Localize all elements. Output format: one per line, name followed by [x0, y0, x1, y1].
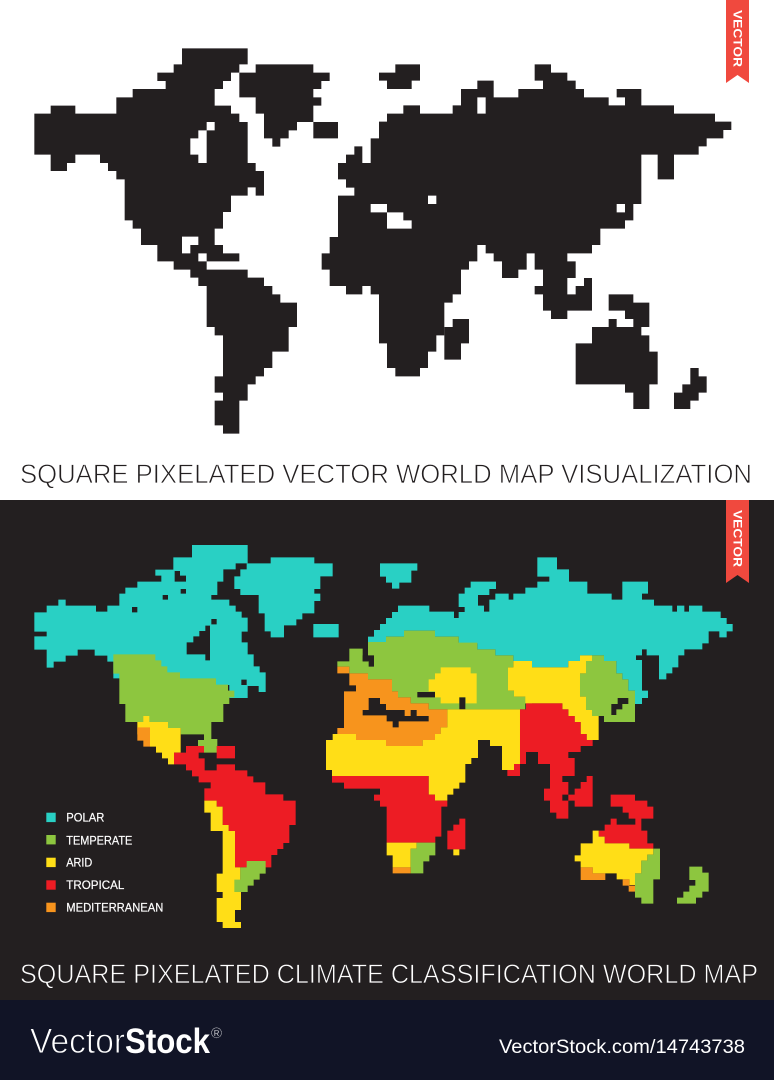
polar iceland: [313, 624, 339, 637]
legend: arid: ARID: [66, 858, 92, 870]
ribbon: top vector badge: VECTOR: [730, 10, 744, 67]
tropical madagascar: [447, 819, 465, 849]
temperate australia: [635, 849, 660, 904]
temperate south america: [234, 861, 266, 892]
caspian and aral seas: [417, 692, 465, 709]
legend: [46, 813, 163, 915]
climate classification world map: [34, 545, 733, 928]
eurasia and africa: [322, 64, 731, 376]
arid east asia: [508, 655, 599, 740]
arid north america: [137, 716, 181, 764]
polar north america: [34, 545, 266, 698]
sea of japan: [611, 698, 628, 715]
mediterranean australia: [581, 867, 635, 892]
panel: dark climate: [0, 500, 774, 1000]
ribbon: top vector badge: [726, 0, 749, 83]
temperate new zealand: [677, 867, 709, 904]
polar eurasia: [368, 557, 733, 704]
footer logo: Stock: [125, 1022, 210, 1061]
arid southern africa: [387, 843, 417, 867]
ribbon: bottom vector badge: VECTOR: [730, 510, 744, 567]
arid central asia: [429, 667, 477, 703]
polar greenland: [234, 557, 333, 637]
mediterranean zone: [337, 667, 447, 746]
arid australia: [575, 831, 653, 885]
footer logo: ®: [211, 1025, 222, 1042]
tropical south east asia: [520, 703, 593, 819]
polar svalbard: [380, 563, 417, 589]
baltic sea: [363, 655, 374, 667]
tropical india tip: [507, 764, 520, 776]
legend: polar: POLAR: [66, 813, 104, 825]
arid south america: [204, 801, 241, 928]
panel: white top: [0, 0, 774, 500]
temperate europe and central asia: [337, 631, 532, 709]
legend: temperate: TEMPERATE: [66, 835, 133, 847]
tropical new guinea and north australia: [599, 795, 653, 849]
mediterranean california: [137, 727, 150, 747]
temperate east asia: [580, 655, 635, 722]
greenland: [239, 64, 330, 147]
australia and new guinea: [576, 294, 658, 409]
madagascar: [444, 319, 469, 360]
ribbon: bottom vector badge: [726, 500, 749, 583]
americas climate zones: [34, 545, 339, 928]
footer logo: Vector: [30, 1022, 125, 1061]
tropical africa: [332, 776, 447, 843]
legend: tropical: TROPICAL: [66, 880, 125, 892]
arid madagascar: [453, 849, 459, 855]
black pixel world map: [34, 48, 731, 434]
footer band: [0, 1000, 774, 1080]
footer logo: [30, 1022, 222, 1061]
footer image id: VectorStock.com/14743738: [499, 1036, 745, 1058]
tropical central and south america: [174, 746, 296, 867]
heading: top map title: SQUARE PIXELATED VECTOR WORLD MAP VISUALIZATION: [20, 459, 752, 489]
north and south america: [34, 48, 297, 434]
iceland: [313, 122, 338, 138]
eurasia, africa and oceania: [322, 64, 731, 409]
mediterranean southern africa: [393, 867, 411, 873]
temperate north america: [113, 654, 234, 753]
tropical caribbean: [217, 746, 235, 758]
americas and greenland: [34, 48, 338, 434]
new zealand: [674, 368, 707, 409]
svalbard: [379, 64, 420, 89]
legend: mediterranean: MEDITERRANEAN: [66, 903, 163, 915]
arid north africa and arabia: [326, 709, 520, 801]
temperate southern africa: [411, 843, 435, 873]
mediterranean sea: [363, 698, 429, 727]
old world climate zones: [326, 557, 733, 904]
